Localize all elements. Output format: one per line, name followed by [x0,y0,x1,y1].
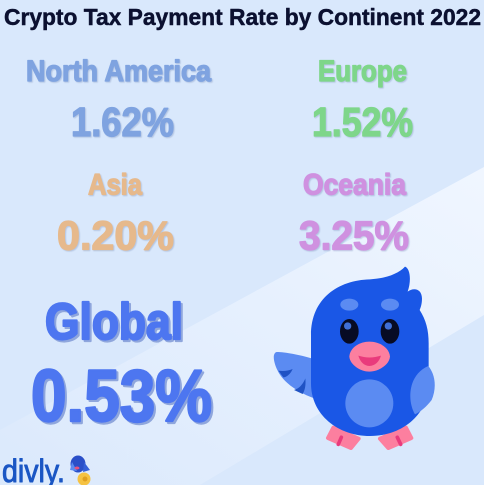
stat: North America [26,55,211,145]
stat: Oceania: 3.25% [299,212,409,258]
stat: Asia: 0.20% [57,212,174,258]
stat: Asia: Asia [88,168,142,202]
stat: Europe: 1.52% [312,99,413,145]
title: Crypto Tax Payment Rate by Continent 2022 [4,4,481,30]
feet [328,428,411,448]
diagonal light band [0,167,484,485]
body [311,267,429,436]
stat: Europe: Europe [318,55,407,88]
belly [345,379,393,427]
beak [349,342,390,372]
right wing [410,366,435,414]
icon: bird mascot [274,267,435,448]
icon: logo bird with coin [70,456,90,485]
eyes [340,319,399,344]
stat: Global: Global [45,293,183,350]
stat: North America: 1.62% [71,99,174,145]
stat: Europe [312,55,413,145]
stat: Oceania [299,168,409,258]
stat: Global [31,293,212,437]
stat: North America: North America [26,55,211,88]
left wing [274,352,315,399]
stat: Asia [57,168,174,258]
brows [340,299,399,311]
stat: Global: 0.53% [31,356,212,437]
stat: Oceania: Oceania [303,168,406,202]
